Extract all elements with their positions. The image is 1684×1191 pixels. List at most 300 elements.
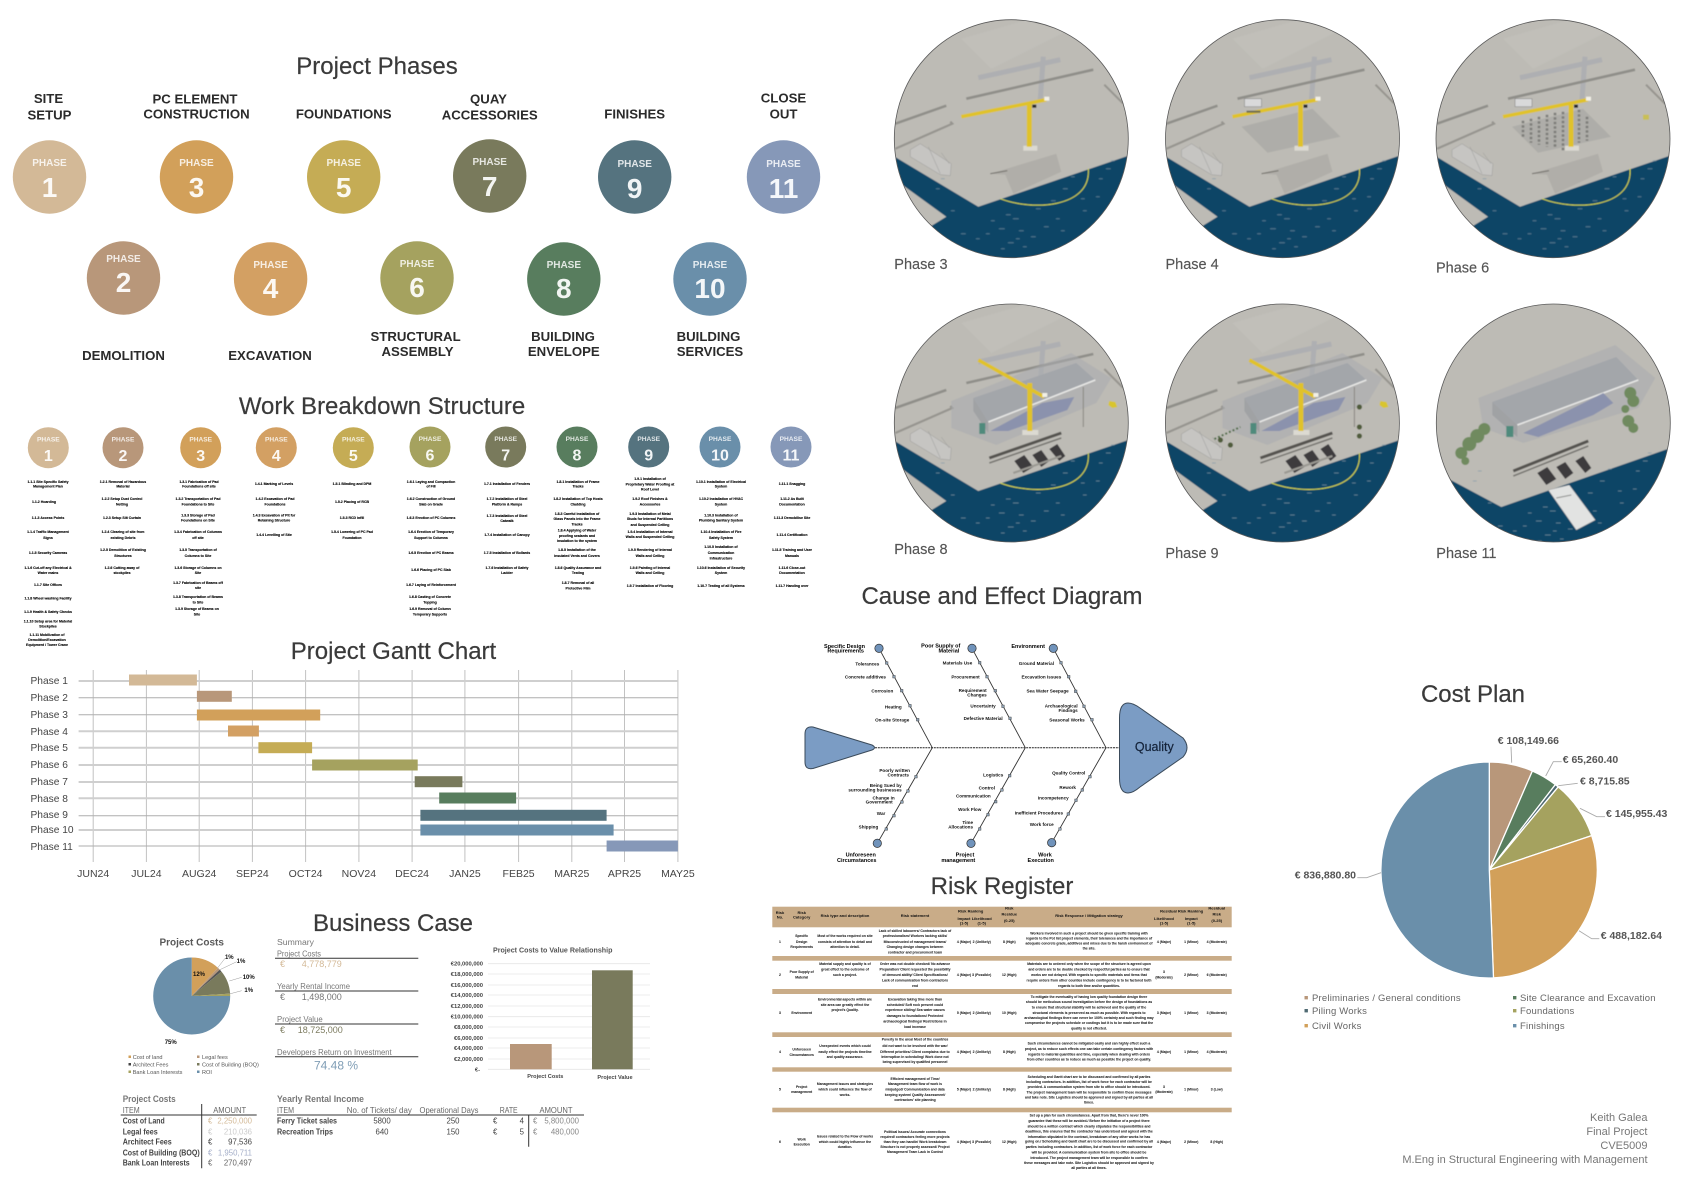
phase 1 xyxy=(13,91,86,214)
wbs column 11: 1.11.6 Close-out xyxy=(779,566,806,570)
bar chart: project costs to value: €14,000,000 xyxy=(451,993,483,999)
table: yearly rental income: 480,000 xyxy=(551,1127,580,1136)
bar chart: project costs to value: €20,000,000 xyxy=(451,962,483,968)
risk row 3: scheduled/ Soft rock present could xyxy=(887,1003,943,1007)
footer credits: Keith Galea xyxy=(1590,1112,1648,1124)
phase 5: PHASE xyxy=(326,158,361,169)
wbs column 6: 1.6.2 Construction of Ground xyxy=(407,497,455,501)
title: cost plan: Cost Plan xyxy=(1421,681,1525,708)
risk row 2 xyxy=(779,962,1227,988)
cost plan values: € 108,149.66 xyxy=(1498,735,1559,747)
table header: (1-5) xyxy=(1160,920,1169,926)
risk row 3: To mitigate the eventuality of having low quality foundation design there xyxy=(1031,995,1147,999)
pie chart: project costs: 75% xyxy=(165,1040,177,1046)
risk row 6: duration. xyxy=(838,1145,852,1149)
gantt bars xyxy=(129,674,678,852)
risk row 5: works. xyxy=(839,1093,850,1097)
phase 1: PHASE xyxy=(32,158,67,169)
fishbone labels: environment: Sea Water Seepage xyxy=(1026,688,1069,693)
phase 2: PHASE xyxy=(106,254,141,265)
footer credits xyxy=(1402,1112,1648,1166)
phase 5: 5 xyxy=(336,172,351,203)
table: project costs: € xyxy=(208,1138,213,1147)
wbs column 10 xyxy=(696,426,746,588)
summary block: € xyxy=(280,992,285,1002)
wbs column 3: 1.3.1 Fabrication of Pad xyxy=(179,480,219,484)
risk row 6: Management Team Lack in Control xyxy=(887,1150,943,1154)
risk row 6: deadlines, this ensures that the contractor has understood and agreed with the xyxy=(1025,1130,1153,1134)
risk row 6: these messages and take note. Site Logistics should be approved and signed by xyxy=(1024,1161,1154,1165)
risk row 3: archaeological findings/ Restrictions in xyxy=(883,1020,947,1024)
risk row 6 xyxy=(779,1114,1223,1170)
risk row 3 xyxy=(779,995,1227,1030)
risk row 6: Political Issues/ Accurate connections xyxy=(884,1130,946,1134)
table: project costs: Architect Fees xyxy=(123,1137,172,1147)
wbs column 5: 1.5.4 Lowering of PC Pad xyxy=(331,530,373,534)
risk row 6: should be a written contract which clearly stipulates the responsibilities and xyxy=(1027,1124,1151,1128)
table: yearly rental income: 250 xyxy=(446,1116,460,1125)
risk row 4: Poverty in the area/ Most of the countries xyxy=(882,1038,948,1042)
fishbone labels: unforeseen circumstances: Government xyxy=(866,799,893,804)
wbs column 8: insulation to the system xyxy=(557,539,597,543)
wbs column 4: 1.4.2 Excavation of Pad xyxy=(256,497,294,501)
wbs column 11: 1.11.1 Snagging xyxy=(779,482,805,486)
table: project costs: € xyxy=(208,1148,213,1157)
wbs column 9: Studs for Internal Partitions xyxy=(627,517,673,521)
title: risk register: Risk Register xyxy=(931,873,1073,900)
table: project costs: AMOUNT xyxy=(213,1105,247,1115)
wbs column 1: 1 xyxy=(44,448,53,465)
wbs column 9: 1.9.7 Installation of Flooring xyxy=(627,584,673,588)
wbs column 2: 1.2.2 Setup Dust Control xyxy=(102,497,142,501)
risk row 6: 8 (High) xyxy=(1210,1140,1223,1144)
summary block: € xyxy=(280,959,285,969)
risk row 4: 8 (High) xyxy=(1003,1050,1016,1054)
phase 11: OUT xyxy=(770,106,797,122)
table bands xyxy=(772,907,1232,1112)
risk row 5: and take note. Site Logistics should be approved and signed by all parties at all xyxy=(1025,1096,1153,1100)
pie legend: Architect Fees xyxy=(133,1063,169,1069)
wbs column 1: 1.1.7 Site Offices xyxy=(34,583,62,587)
table: yearly rental income: ITEM xyxy=(277,1105,294,1115)
spine and bones xyxy=(873,644,1119,848)
gantt phase labels: Phase 6 xyxy=(30,760,68,771)
pie chart: project costs: 1% xyxy=(244,988,254,994)
phase 11 xyxy=(747,90,820,214)
wbs column 2: Netting xyxy=(116,502,128,506)
risk row 4: Different priorities/ Client complains due to xyxy=(880,1050,950,1054)
wbs column 11: 1.11.4 Certification xyxy=(777,533,807,537)
fishbone labels: project management: Communication xyxy=(956,793,991,798)
risk row 6: Structure is not properly assessed/ Project xyxy=(880,1145,950,1149)
wbs column 10: PHASE xyxy=(709,436,732,443)
title: cause and effect diagram: Cause and Effect Diagram xyxy=(861,583,1143,610)
wbs column 4: Foundations xyxy=(264,502,286,506)
fishbone labels: unforeseen circumstances: Being Sued by xyxy=(870,783,902,788)
wbs column 11: 1.11.5 Training and User xyxy=(772,548,813,552)
phase 4: PHASE xyxy=(253,260,288,271)
phase 11: 11 xyxy=(769,173,798,204)
table header: (1-5) xyxy=(1187,920,1196,926)
table: yearly rental income: Ferry Ticket sales xyxy=(277,1115,337,1125)
risk row 6: which could highly influence the xyxy=(818,1140,871,1144)
risk row 1: 2 (Unlikely) xyxy=(973,940,991,944)
bar chart: project costs to value: Project Value xyxy=(597,1075,633,1081)
risk row 3: should be meticulous sound investigation before the design of foundations as xyxy=(1026,1000,1152,1004)
table header: Risk xyxy=(776,910,785,915)
wbs column 2: 1.2.3 Setup Silt Curtain xyxy=(103,516,141,520)
risk row 4: Circumstances xyxy=(790,1053,814,1057)
phase 3: PC ELEMENT xyxy=(152,92,238,106)
phase 7: ACCESSORIES xyxy=(442,108,538,122)
wbs column 10: System xyxy=(715,484,727,488)
risk row 2: 3 xyxy=(1163,970,1165,974)
table: yearly rental income: 4 xyxy=(520,1116,525,1125)
wbs column 1: 1.1.2 Hoarding xyxy=(32,500,56,504)
pie legend: ROI xyxy=(202,1070,212,1076)
wbs column 5: 1.5.3 RCD infill xyxy=(340,516,364,520)
wbs column 6 xyxy=(406,426,457,616)
phase 9 xyxy=(598,106,671,214)
risk row 4: did not want to be involved with the war/ xyxy=(882,1044,948,1048)
phase 11: PHASE xyxy=(766,159,801,170)
wbs column 6: 1.6.5 Erection of PC Beams xyxy=(408,551,454,555)
gantt month axis: APR25 xyxy=(608,868,641,880)
wbs column 1: 1.1.5 Security Cameras xyxy=(29,551,67,555)
wbs column 4: 1.4.1 Marking of Levels xyxy=(255,482,293,486)
risk row 2: Preparation/ Client requested the possibility xyxy=(879,968,951,972)
gantt month axis: OCT24 xyxy=(289,868,323,880)
wbs column 1: 1.1.3 Access Points xyxy=(32,516,64,520)
cost plan legend: Foundations xyxy=(1520,1006,1575,1017)
summary block: Summary xyxy=(277,937,315,947)
summary block: Yearly Rental Income xyxy=(277,981,350,991)
risk row 3: compromise the projects schedule or costings but it is to be made sure that the xyxy=(1025,1021,1153,1025)
fishbone labels: work execution: Rework xyxy=(1059,785,1076,790)
risk row 1: regards to the Pot list project elements, their tolerances and the importance of xyxy=(1026,937,1153,941)
table: project costs: Bank Loan Interests xyxy=(123,1158,190,1168)
table: yearly rental income: € xyxy=(533,1116,538,1125)
risk row 3: Environmental aspects within are xyxy=(818,998,872,1002)
table: yearly rental income: 150 xyxy=(446,1127,460,1136)
site render: phase 4 xyxy=(1162,19,1402,273)
risk row 6: 3 (Possible) xyxy=(972,1140,991,1144)
site render: phase 8 xyxy=(891,303,1131,558)
risk row 1: Requirements xyxy=(790,945,813,949)
phase 6 xyxy=(371,241,461,359)
site render: phase 6: Phase 6 xyxy=(1436,261,1489,277)
phase 8: PHASE xyxy=(547,260,581,271)
wbs column 7: Ladder xyxy=(501,571,513,575)
cost plan leaders xyxy=(1357,747,1605,939)
wbs column 5: 5 xyxy=(349,448,358,465)
fishbone labels: poor supply of material: Uncertainty xyxy=(970,703,996,708)
gantt month axis: FEB25 xyxy=(503,868,535,880)
phase 5: FOUNDATIONS xyxy=(296,106,392,122)
risk row 6: Set up a plan for such circumstances. Apart from that, there's never 100% xyxy=(1030,1114,1148,1118)
summary block: Project Costs xyxy=(277,948,321,958)
table header: Risk Ranking xyxy=(958,908,984,914)
wbs column 4: 1.4.4 Levelling of Site xyxy=(256,533,292,537)
wbs column 8: Glass Panels into the Frame xyxy=(554,517,600,521)
risk row 1: Specific xyxy=(795,934,808,938)
risk row 1: 8 (High) xyxy=(1003,940,1016,944)
risk row 2: 2 (Minor) xyxy=(1184,973,1198,977)
bar chart: project costs to value: €10,000,000 xyxy=(451,1015,483,1021)
wbs column 11: Documentation xyxy=(779,502,805,506)
wbs column 3: 1.3.2 Transportation of Pad xyxy=(176,497,220,501)
wbs column 7: 1.7.4 Installation of Canopy xyxy=(484,533,530,537)
wbs column 6: 1.6.3 Erection of PC Columns xyxy=(407,516,455,520)
risk register table xyxy=(772,906,1232,1170)
wbs column 1 xyxy=(24,427,72,647)
wbs column 9 xyxy=(626,426,675,588)
risk row 2: and orders are to be double checked by respectful parties as to ensure that xyxy=(1028,968,1151,972)
wbs column 8 xyxy=(553,426,603,590)
risk row 5: 3 (Low) xyxy=(1211,1088,1223,1092)
risk row 1: Design xyxy=(796,940,807,944)
table: project costs: € xyxy=(208,1127,213,1136)
risk row 4: 2 (Unlikely) xyxy=(973,1050,991,1054)
wbs column 1: 1.1.6 Cut-off any Electrical & xyxy=(24,566,72,570)
risk row 4: Unexpected events which could xyxy=(819,1044,871,1048)
phase 9: PHASE xyxy=(617,159,652,170)
wbs column 6: 1.6.8 Casting of Concrete xyxy=(409,595,451,599)
bar chart: project costs to value: Project Costs to Value Relationship xyxy=(493,946,613,954)
gantt phase labels: Phase 5 xyxy=(30,743,68,754)
site render: phase 8: Phase 8 xyxy=(894,542,948,558)
risk row 5: 2 (Unlikely) xyxy=(973,1088,991,1092)
fishbone labels: unforeseen circumstances: Contracts xyxy=(888,772,909,777)
phase 7: 7 xyxy=(482,171,497,202)
risk row 6: Execution xyxy=(794,1142,810,1146)
site render: phase 6 xyxy=(1433,19,1673,277)
table header: Risk statement xyxy=(901,913,930,918)
wbs column 9: 1.9.5 Rendering of Internal xyxy=(628,548,672,552)
risk row 5: The project management team will be responsible to confirm these messages xyxy=(1027,1090,1152,1094)
wbs column 10: 1.10.4 Installation of Fire xyxy=(701,530,741,534)
risk row 2: require orders from other counties include contingency is to be factored both xyxy=(1027,978,1151,982)
risk row 3: to ensure that structural stability will be achieved and the quality of the xyxy=(1032,1006,1146,1010)
table: project costs: 2,250,000 xyxy=(217,1116,253,1125)
gantt month axis: JAN25 xyxy=(449,868,481,880)
fishbone labels: work execution: Execution xyxy=(1028,858,1054,864)
table: yearly rental income xyxy=(277,1094,584,1147)
risk row 5: Scheduling and Gantt chart are to be discussed and confirmed by all parties xyxy=(1028,1075,1151,1079)
wbs column 3: 1.3.4 Fabrication of Columns xyxy=(174,530,222,534)
wbs column 10: System xyxy=(715,571,727,575)
bar chart: project costs to value: €2,000,000 xyxy=(454,1057,483,1063)
wbs column 2: stockpiles xyxy=(113,571,131,575)
table header: Risk type and description xyxy=(821,913,870,918)
cost plan values: € 145,955.43 xyxy=(1606,808,1667,820)
risk row 6: 6 xyxy=(779,1140,781,1144)
wbs column 4: 1.4.3 Excavation of Pit for xyxy=(253,514,296,518)
wbs column 8: Protective Film xyxy=(565,586,591,590)
wbs column 9: 1.9.1 Installation of xyxy=(634,477,667,481)
gantt month axis: JUN24 xyxy=(77,868,109,880)
wbs column 3: Site xyxy=(194,612,200,616)
wbs column 8: 8 xyxy=(573,447,582,464)
risk row 3: 1 (Minor) xyxy=(1184,1011,1198,1015)
wbs column 8: 1.8.2 Installation of Top Hosts xyxy=(553,497,603,501)
pie chart: cost plan xyxy=(1295,735,1667,1032)
risk row 3: 2 (Unlikely) xyxy=(973,1011,991,1015)
wbs column 5: Foundation xyxy=(342,536,362,540)
table: project costs: Cost of Land xyxy=(123,1115,165,1125)
risk row 1: 4 (Moderate) xyxy=(1207,940,1227,944)
gantt chart xyxy=(30,670,695,880)
risk row 2: such a project. xyxy=(833,973,857,977)
site render: phase 4: Phase 4 xyxy=(1166,257,1219,273)
cost plan legend: Site Clearance and Excavation xyxy=(1520,993,1656,1004)
wbs column 3 xyxy=(173,427,224,616)
risk row 5: contractors' site planning xyxy=(894,1098,936,1102)
table header: (0-25) xyxy=(1211,918,1223,923)
risk row 5: 5 (Major) xyxy=(957,1088,971,1092)
phase 6: ASSEMBLY xyxy=(381,344,454,359)
wbs column 7 xyxy=(484,426,530,575)
wbs column 4: PHASE xyxy=(265,436,288,444)
table: project costs: € xyxy=(208,1116,213,1125)
fishbone labels: poor supply of material: Defective Material xyxy=(964,716,1003,721)
fishbone labels: poor supply of material: Material xyxy=(939,648,960,654)
phase 8: 8 xyxy=(556,273,572,304)
phase 8: ENVELOPE xyxy=(528,344,600,359)
wbs column 8: insulated Vents and Covers xyxy=(554,554,600,558)
risk row 5: misjudged/ Communication and data xyxy=(885,1088,945,1092)
risk row 2: works are not delayed. With regards to specific materials and items that xyxy=(1030,973,1148,977)
risk row 5: 3 xyxy=(1163,1085,1165,1089)
phase 4: EXCAVATION xyxy=(228,348,312,363)
table header: (1-5) xyxy=(960,920,969,926)
wbs column 8: 1.8.4 Applying of Water xyxy=(558,528,597,532)
phase 3: CONSTRUCTION xyxy=(143,106,250,122)
risk row 5: times. xyxy=(1084,1100,1094,1104)
table header: Risk Response / Mitigation strategy xyxy=(1055,913,1124,918)
risk row 1: 1 xyxy=(779,940,781,944)
phase 6: STRUCTURAL xyxy=(371,329,461,344)
risk row 5: Management team flow of work is xyxy=(888,1082,942,1086)
table: project costs: ITEM xyxy=(123,1105,140,1115)
wbs column 10: System xyxy=(715,502,727,506)
fishbone labels: work execution: Incompetency xyxy=(1038,795,1069,800)
wbs column 3: PHASE xyxy=(189,436,213,444)
wbs column 3: 1.3.5 Transportation of xyxy=(179,548,218,552)
risk row 1: Misconstructed of management teams/ xyxy=(884,940,946,944)
table: yearly rental income: 5,800,000 xyxy=(544,1116,580,1125)
wbs column 1: Stockpiles xyxy=(39,624,57,628)
risk row 4: from other countries as to reduce as much as possible the project on quality. xyxy=(1027,1058,1151,1062)
gantt phase labels: Phase 11 xyxy=(30,842,73,853)
gantt phase labels: Phase 3 xyxy=(30,710,68,721)
title: project gantt chart: Project Gantt Chart xyxy=(291,638,497,665)
risk row 6: 4 (Major) xyxy=(957,1140,971,1144)
risk row 3: quality is not effected. xyxy=(1071,1026,1107,1030)
fishbone labels: project management: management xyxy=(941,858,975,864)
risk row 6: than they can handle/ Work breakdown xyxy=(884,1140,946,1144)
wbs column 10: 1.10.7 Testing of all Systems xyxy=(697,584,745,588)
wbs column 11: 1.11.3 Demobilise Site xyxy=(774,516,810,520)
wbs column 11: PHASE xyxy=(780,436,803,443)
fishbone labels: unforeseen circumstances: Shipping xyxy=(859,824,878,829)
phase 8 xyxy=(527,242,600,359)
bar chart: project costs to value: €8,000,000 xyxy=(454,1025,483,1031)
risk row 4: being supervised by qualified personnel xyxy=(883,1060,947,1064)
phase 1: SETUP xyxy=(28,108,72,122)
table: project costs: 97,536 xyxy=(228,1138,252,1147)
wbs column 2: existing Debris xyxy=(110,536,136,540)
wbs column 10: 1.10.2 Installation of HVAC xyxy=(699,497,744,501)
fishbone labels: environment: Findings xyxy=(1059,708,1078,713)
pie legend: Bank Loan Interests xyxy=(133,1070,183,1076)
wbs column 3: 3 xyxy=(196,448,205,465)
phase 1: SITE xyxy=(34,91,63,106)
risk row 3: project's Quality. xyxy=(831,1008,859,1012)
summary block: 74.48 % xyxy=(314,1058,358,1072)
fishbone labels: unforeseen circumstances: Change in xyxy=(872,795,895,800)
cost plan legend: Preliminaries / General conditions xyxy=(1312,993,1461,1004)
fishbone labels: environment: Ground Material xyxy=(1019,661,1054,666)
risk row 1: 4 (Major) xyxy=(957,940,971,944)
phase 10: BUILDING xyxy=(677,329,740,344)
fishbone labels: poor supply of material: Materials Use xyxy=(943,660,973,665)
fishbone labels: work execution: Work force xyxy=(1030,822,1054,827)
fishbone labels: project management: Project xyxy=(956,853,974,859)
footer credits: CVE5009 xyxy=(1600,1140,1648,1152)
fishbone labels: unforeseen circumstances: surrounding businesses xyxy=(848,787,902,792)
table header: Likelihood xyxy=(1154,916,1175,921)
phase 7: QUAY xyxy=(470,92,507,106)
pie chart: project costs: 12% xyxy=(193,972,206,978)
table: yearly rental income: Yearly Rental Income xyxy=(277,1094,364,1104)
title: project phases: Project Phases xyxy=(296,53,458,80)
wbs column 8: 1.8.1 Installation of Frame xyxy=(557,480,600,484)
fishbone labels: specific design requirements xyxy=(824,644,910,722)
risk row 4: Unforeseen xyxy=(792,1048,811,1052)
risk row 4: and quality assurance. xyxy=(827,1055,863,1059)
fishbone labels: unforeseen circumstances: Unforeseen xyxy=(846,853,876,859)
phase 10: SERVICES xyxy=(677,344,743,359)
risk row 6: 4 (Major) xyxy=(1157,1140,1171,1144)
title: work breakdown structure: Work Breakdown Structure xyxy=(239,393,525,420)
risk row 4: 4 xyxy=(779,1050,781,1054)
footer credits: Final Project xyxy=(1586,1126,1648,1138)
risk row 5: management xyxy=(791,1090,813,1094)
wbs column 2: PHASE xyxy=(112,436,135,444)
wbs column 7: PHASE xyxy=(494,436,518,443)
wbs column 1: 1.1.4 Traffic Management xyxy=(27,530,70,534)
wbs column 6: 1.6.1 Laying and Compaction xyxy=(407,480,455,484)
fishbone labels: project management xyxy=(941,773,1004,864)
risk row 1 xyxy=(779,929,1227,954)
summary block xyxy=(275,937,418,1072)
risk row 5: Efficient management of Time/ xyxy=(890,1077,940,1081)
wbs column 10: 10 xyxy=(711,447,729,464)
bar chart: project costs to value: €4,000,000 xyxy=(454,1046,483,1052)
wbs column 9: and Suspended Ceiling xyxy=(631,523,669,527)
fish head: quality xyxy=(1120,703,1187,793)
bar chart: project costs to value: €6,000,000 xyxy=(454,1036,483,1042)
wbs column 9: 9 xyxy=(644,447,653,464)
summary block: 4,778,779 xyxy=(302,959,342,969)
risk row 5 xyxy=(779,1075,1223,1104)
phase 7 xyxy=(442,92,538,213)
risk row 5: including contractors. In addition, list of work force for each contractor will be xyxy=(1026,1080,1152,1084)
wbs column 7: 1.7.2 Installation of Steel xyxy=(487,497,527,501)
wbs column 8: Tracks xyxy=(572,484,584,488)
wbs column 3: 1.3.7 Fabrication of Beams off xyxy=(173,581,224,585)
